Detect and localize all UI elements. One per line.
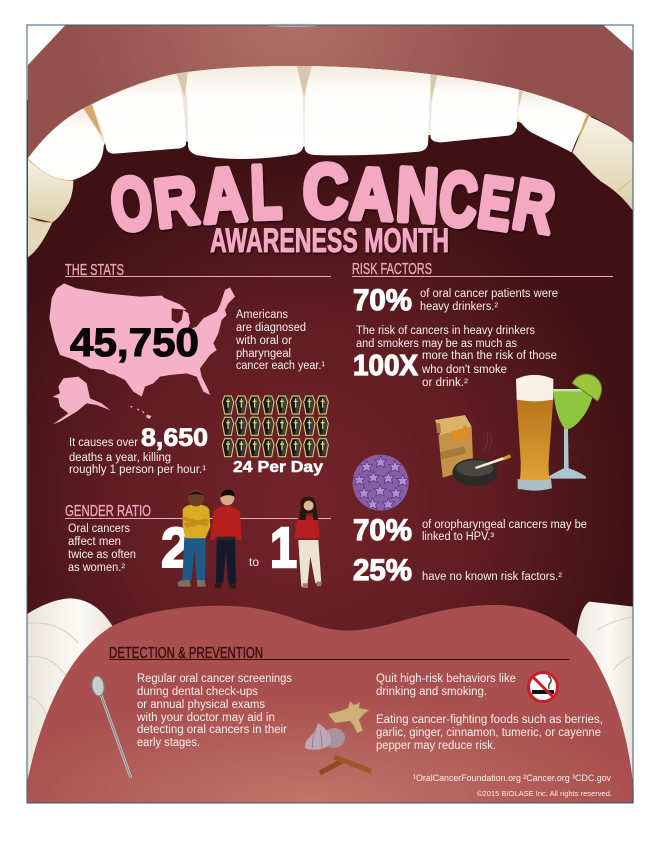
text: cancer-fighting foods: pepper may reduce risk. [376,740,496,752]
man in red shirt [210,490,242,589]
upper teeth [28,66,634,257]
text: screenings: or annual physical exams [137,699,265,711]
stat: 45,750: 45,750 [70,321,199,365]
stat: 70% HPV [353,514,587,547]
heading: the stats: THE STATS [65,262,124,279]
title [106,148,560,249]
illustration: HPV virus [353,455,409,511]
stat: 70% heavy drinkers: 70% [353,284,412,317]
ashtray and cigarette [452,432,511,486]
text: screenings: early stages. [137,737,200,749]
text: screenings: during dental check-ups [137,686,258,698]
title: N [394,153,440,239]
lower teeth and tongue [27,598,634,803]
cigarette pack [435,415,473,478]
title: A [349,153,395,236]
stat: 100X risk: 100X [353,350,419,382]
text: americans diagnosed: with oral or [235,335,292,347]
beer glass [516,375,553,491]
heading: risk factors: RISK FACTORS [352,261,432,278]
stat: 25% no known factors [353,554,562,587]
upper gum [28,23,634,158]
text: deaths per year: deaths a year, killing [69,452,171,464]
copyright: ©2015 BIOLASE Inc. All rights reserved. [477,789,612,798]
text: gender description [68,523,136,574]
left molars [28,158,73,222]
title: A [199,151,249,239]
right molars [572,116,634,212]
text: quit high-risk behaviors: Quit high-risk behaviors like [376,673,516,685]
subtitle: AWARENESS MONTH [210,222,449,260]
title: L [249,149,283,235]
heading: detection and prevention: DETECTION & PREVENTION [109,645,263,662]
text: cancer-fighting foods: garlic, ginger, cinnamon, tumeric, or cayenne [376,727,601,739]
text: americans diagnosed: pharyngeal [236,348,291,360]
text: americans diagnosed: cancer each year.¹ [236,360,325,372]
man in yellow shirt [177,490,210,587]
ratio: 2 to 1 [161,516,297,580]
panel: the stats [49,262,331,476]
label: 24 per day: 24 Per Day [233,459,323,476]
stat: 100X risk: or drink.² [422,377,468,389]
icon: no smoking [528,672,558,702]
tongue [27,605,634,803]
ratio: 2 to 1: 1 [270,516,297,580]
woman in red top [294,497,321,588]
text: deaths per year: roughly 1 person per hour.¹ [69,464,206,476]
stat: 70% heavy drinkers: of oral cancer patients were [420,288,558,300]
stat: 70% HPV: 70% [353,514,412,547]
text: gender description: Oral cancers [68,523,130,535]
stat: 100X risk: more than the risk of those [422,350,557,362]
title: E [474,162,517,247]
panel: gender ratio [65,490,331,589]
margarita [548,374,602,479]
background: mouth cavity [27,100,633,803]
text: americans diagnosed: are diagnosed [236,322,306,334]
stat: 100X risk: who don't smoke [421,364,507,376]
text: quit high-risk behaviors: drinking and smoking. [376,686,487,698]
icon: dental mirror [91,675,131,778]
stat: 70% heavy drinkers: heavy drinkers.² [420,301,498,313]
text: screenings: Regular oral cancer screenings [137,673,292,685]
stat: 70% HPV: linked to HPV.³ [422,531,494,543]
ratio: 2 to 1: to [249,557,259,569]
text: deaths per year [69,424,208,476]
stat: 70% HPV: of oropharyngeal cancers may be [422,519,587,531]
text: deaths per year: It causes over [69,437,138,449]
text: screenings: detecting oral cancers in their [137,724,287,736]
text: cancer-fighting foods: Eating cancer-fighting foods such as berries, [376,714,603,726]
text: deaths per year: 8,650 [141,424,208,452]
text: americans diagnosed [235,309,325,372]
heading: gender ratio: GENDER RATIO [65,503,151,520]
panel: risk factors [352,261,613,587]
icon grid: coffins [222,396,328,457]
sources: ¹OralCancerFoundation.org ²Cancer.org ³CDC.gov [413,773,611,784]
gum gaps between teeth [83,104,102,137]
upper incisors [92,74,186,154]
text: gender description: as women.² [68,562,125,574]
stat: 70% heavy drinkers [353,284,558,317]
panel: detection and prevention [91,645,612,798]
stat: 100X risk: The risk of cancers in heavy drinkers [356,325,535,337]
text: gender description: affect men [68,536,121,548]
text: screenings: with your doctor may aid in [136,712,275,724]
title: R [508,165,560,249]
text: cancer-fighting foods [376,714,603,752]
title: R [150,161,202,242]
icon: cinnamon [320,757,371,773]
text: quit high-risk behaviors [376,673,516,698]
text: screenings [136,673,292,749]
stat: 100X risk: and smokers may be as much as [356,338,517,350]
title: C [302,148,349,234]
text: gender description: twice as often [68,549,136,561]
lower right tooth [574,602,634,797]
title: O [106,160,157,248]
illustration: tobacco and alcohol [435,374,602,491]
text: americans diagnosed: Americans [236,309,288,321]
icon: garlic [305,723,345,750]
ratio: 2 to 1: 2 [161,516,191,580]
title: C [436,155,481,243]
stat: 25% no known factors: have no known risk factors.² [422,571,562,583]
stat: 25% no known factors: 25% [353,554,412,587]
stat: 100X risk [353,325,557,389]
map: United States [49,283,235,424]
icon: ginger [328,701,369,733]
illustration: two men and a woman [177,490,321,589]
lower left tooth [27,598,115,783]
